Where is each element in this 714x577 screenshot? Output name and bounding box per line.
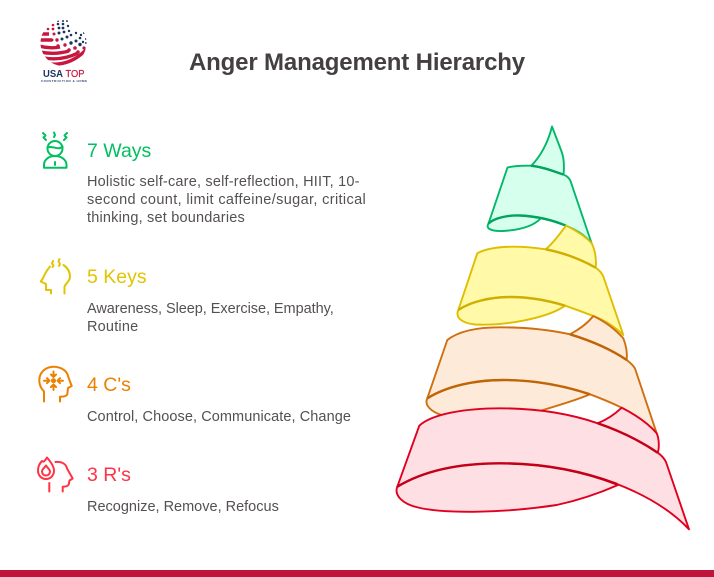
text: 5 Keys details	[87, 300, 334, 334]
tier: orange	[426, 316, 657, 433]
logo	[40, 20, 87, 82]
heading: 5 Keys: 5 Keys	[87, 266, 147, 288]
text: 7 Ways details	[87, 174, 366, 226]
tier: green	[488, 126, 592, 244]
tier: yellow	[457, 226, 623, 335]
text: 7 Ways details: second count, limit caffeine/sugar, critical	[87, 192, 366, 208]
bottom bar	[0, 570, 714, 577]
title: Anger Management Hierarchy	[189, 49, 525, 76]
text: 7 Ways details: Holistic self-care, self-reflection, HIIT, 10-	[87, 174, 360, 190]
text: 5 Keys details: Awareness, Sleep, Exercise, Empathy,	[87, 300, 334, 316]
text: 4 C's details: Control, Choose, Communicate, Change	[87, 409, 351, 425]
logo wordmark: USA	[43, 68, 63, 80]
logo globe	[39, 20, 87, 64]
text: 7 Ways details: thinking, set boundaries	[87, 210, 245, 226]
heading: 3 R's: 3 R's	[87, 464, 131, 486]
logo: TOP	[66, 68, 84, 80]
tier: red	[397, 408, 689, 529]
text: 3 R's details: Recognize, Remove, Refocus	[87, 499, 279, 515]
logo tagline: CONSTRUCTION & HOME	[41, 79, 87, 83]
text: 5 Keys details: Routine	[87, 318, 138, 334]
heading: 4 C's: 4 C's	[87, 374, 131, 396]
heading: 7 Ways: 7 Ways	[87, 140, 151, 162]
